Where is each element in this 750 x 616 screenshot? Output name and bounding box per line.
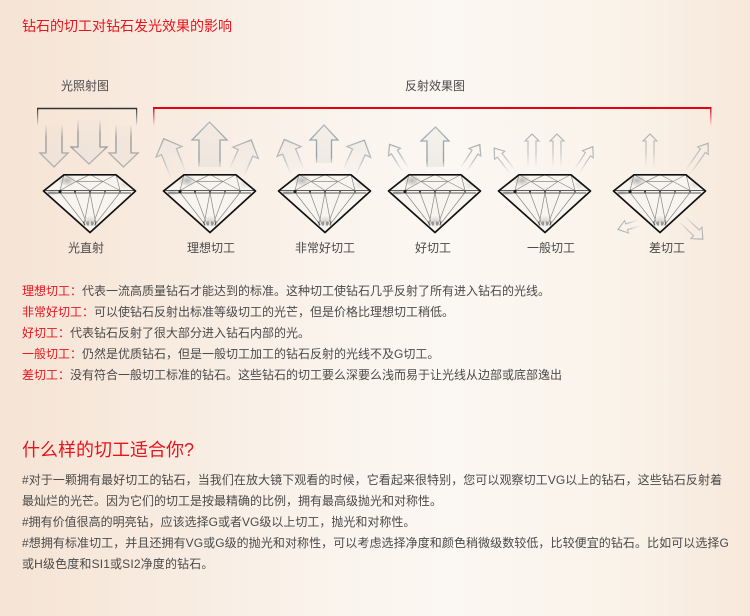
label: direct light: 光直射 [68,241,104,255]
diamond: good cut [388,174,481,232]
bracket: light diagram [37,108,137,126]
arrows: poor cut [616,134,713,245]
label: fair cut: 一般切工 [527,241,575,255]
text block: cut grade definitions: 一般切工：仍然是优质钻石，但是一般切工加工的钻石反射的光线不及G切工。 [22,347,439,361]
diagram: light reflection [37,107,712,240]
text block: cut grade definitions: 差切工：没有符合一般切工标准的钻石。这些钻石的切工要么深要么浅而易于让光线从边部或底部逸出 [22,368,562,382]
bracket: reflection diagram [153,107,712,126]
label: poor cut: 差切工 [649,241,685,255]
text block: advice: #想拥有标准切工，并且还拥有VG或G级的抛光和对称性，可以考虑选择净度和颜色稍微级数较低，比较便宜的钻石。比如可以选择G [22,536,729,550]
diamond: very good cut [278,174,371,232]
diamond: poor cut [613,174,706,232]
label: reflection diagram: 反射效果图 [405,79,465,93]
label: very good cut: 非常好切工 [295,241,355,255]
heading: which cut suits you: 什么样的切工适合你? [22,440,194,460]
text block: advice [22,473,729,571]
text block: advice: 最灿烂的光芒。因为它们的切工是按最精确的比例，拥有最高级抛光和对称性。 [22,494,442,508]
text block: advice: #拥有价值很高的明亮钻，应该选择G或者VG级以上切工，抛光和对称性。 [22,515,415,529]
arrows: good cut [384,127,486,173]
label: ideal cut: 理想切工 [187,241,235,255]
label: light diagram: 光照射图 [61,79,109,93]
text block: cut grade definitions: 非常好切工：可以使钻石反射出标准等级切工的光芒，但是价格比理想切工稍低。 [22,305,454,319]
diamond: ideal cut [163,174,256,232]
text block: cut grade definitions [22,284,562,382]
label: good cut: 好切工 [415,241,451,255]
text block: cut grade definitions: 好切工：代表钻石反射了很大部分进入钻石内部的光。 [22,326,310,340]
diamond: direct light [43,174,136,232]
arrows: fair cut [489,134,598,175]
diamond: fair cut [498,174,591,232]
arrows: very good cut [272,125,376,176]
text block: advice: #对于一颗拥有最好切工的钻石，当我们在放大镜下观看的时候，它看起来很特别，您可以观察切工VG以上的钻石，这些钻石反射着 [22,473,722,487]
text block: advice: 或H级色度和SI1或SI2净度的钻石。 [22,557,214,571]
title: 钻石的切工对钻石发光效果的影响 [22,18,232,34]
text block: cut grade definitions: 理想切工：代表一流高质量钻石才能达到的标准。这种切工使钻石几乎反射了所有进入钻石的光线。 [22,284,550,298]
arrows: ideal cut [151,122,264,179]
incoming light arrows [40,120,138,167]
